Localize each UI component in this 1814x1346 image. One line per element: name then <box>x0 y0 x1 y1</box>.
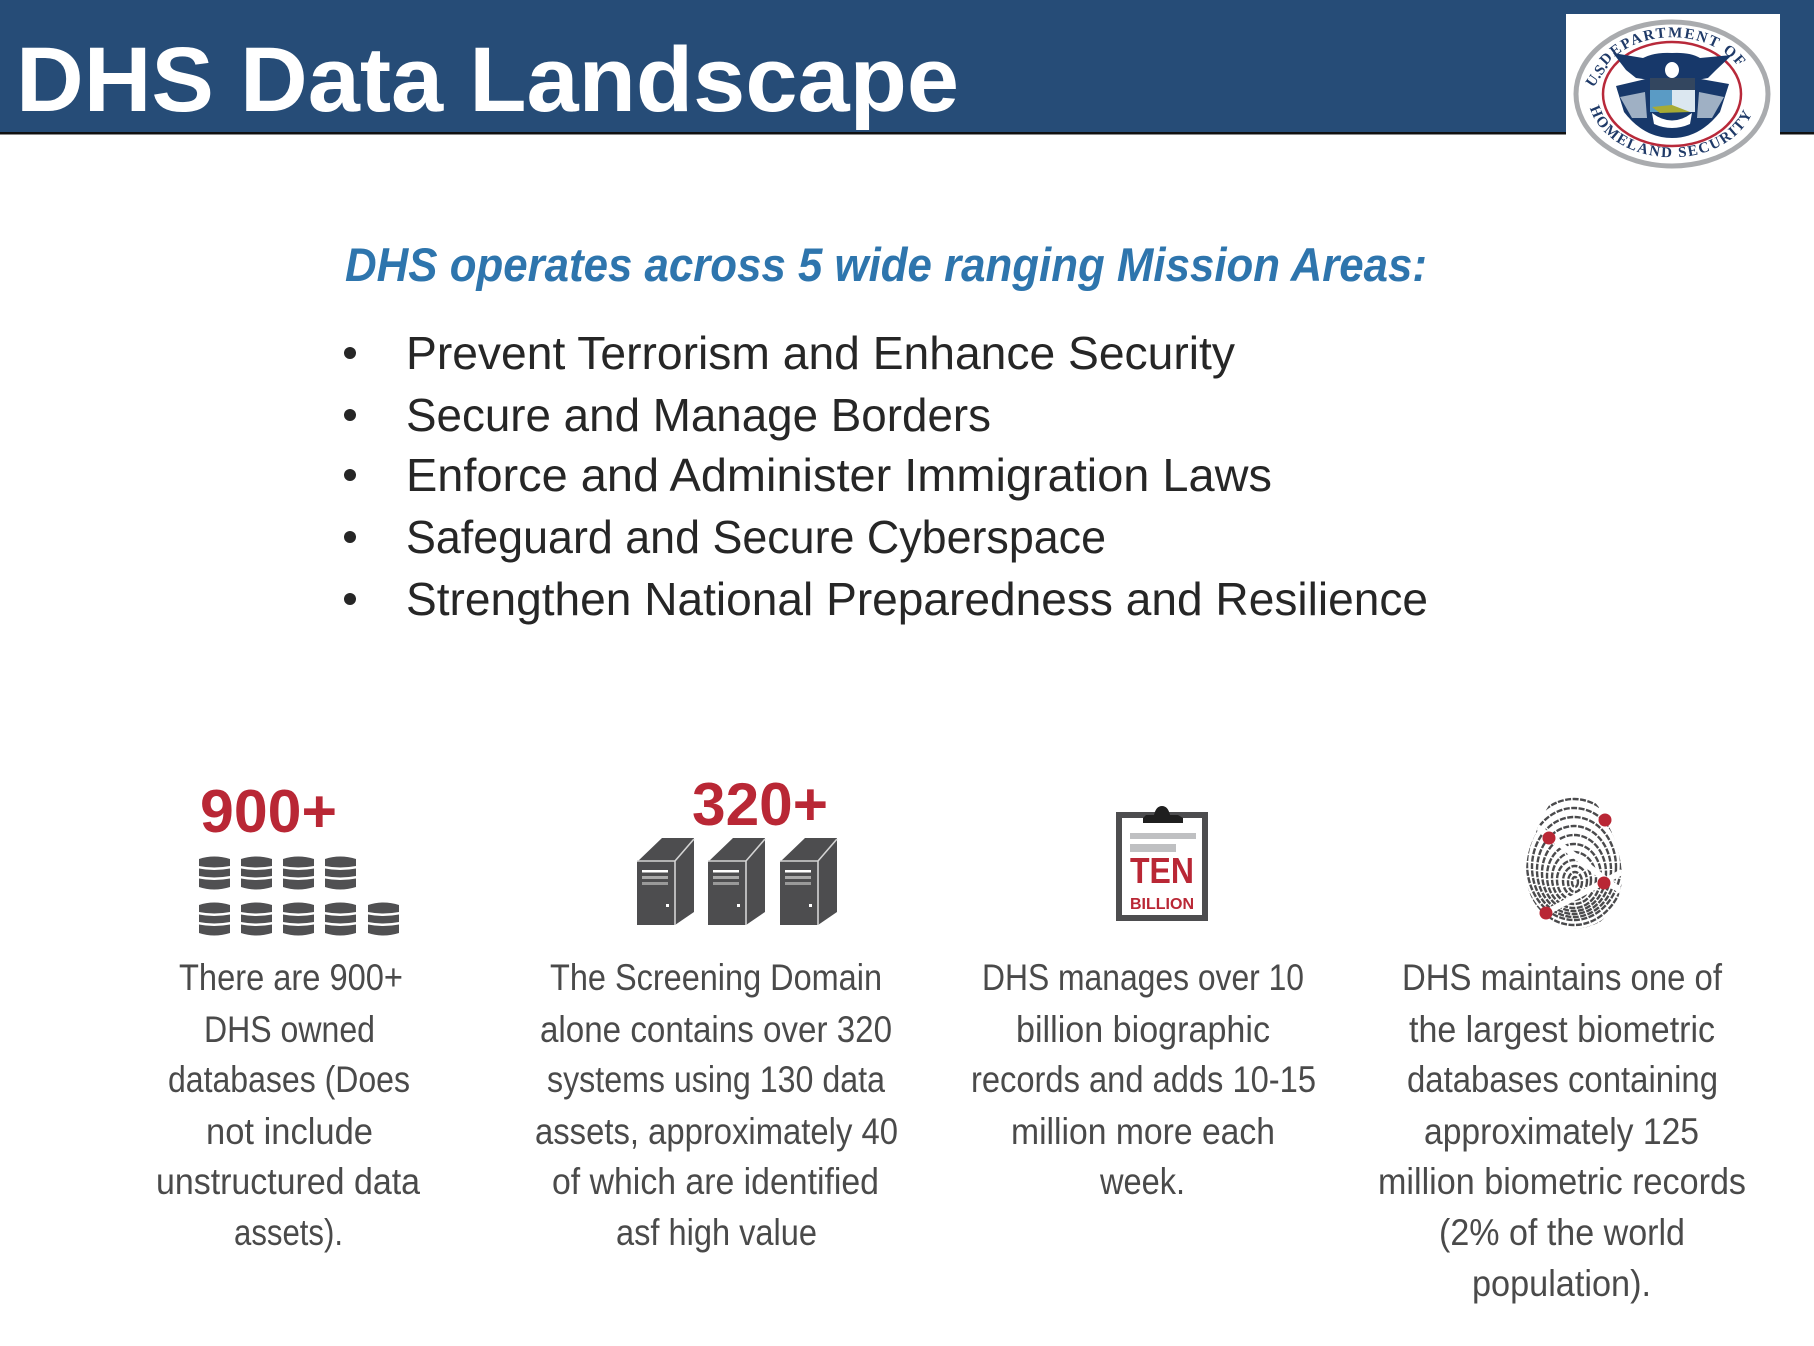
icon: DHS seal: HOMELAND SECURITY <box>1590 104 1751 158</box>
icon: DHS seal: U.S. <box>1583 59 1612 90</box>
text: databases: unstructured data <box>156 1161 420 1202</box>
bullet list: mission areas: Enforce and Administer Immigration Laws <box>406 449 1272 501</box>
bullet list: mission areas: Prevent Terrorism and Enhance Security <box>406 327 1235 379</box>
text: biographic records <box>971 957 1316 1202</box>
text: databases: databases (Does <box>168 1059 410 1100</box>
title: DHS Data Landscape <box>16 29 959 131</box>
icon: clipboard ten billion <box>1119 806 1205 918</box>
header band <box>0 0 1814 134</box>
text: biographic records: records and adds 10-15 <box>971 1059 1316 1100</box>
text: biographic records: DHS manages over 10 <box>982 957 1304 998</box>
text: databases: DHS owned <box>204 1009 375 1050</box>
text: biometric records: DHS maintains one of <box>1402 957 1723 998</box>
icon: database stacks <box>199 856 399 936</box>
text: biometric records: million biometric records <box>1378 1161 1746 1202</box>
text: databases <box>156 957 420 1253</box>
bullet list: mission areas <box>344 327 1428 625</box>
stat: 900+ number: 900+ <box>200 778 337 845</box>
text: biographic records: week. <box>1099 1161 1185 1202</box>
text: biometric records: approximately 125 <box>1424 1111 1699 1152</box>
text: databases: assets). <box>234 1212 343 1253</box>
text: screening domain: of which are identified <box>552 1161 879 1202</box>
icon: clipboard ten billion: TEN <box>1130 850 1194 891</box>
text: screening domain: The Screening Domain <box>550 957 882 998</box>
icon: DHS seal: DEPARTMENT OF <box>1598 27 1746 66</box>
text: biometric records: population). <box>1472 1263 1651 1304</box>
icon: fingerprint <box>1526 798 1622 929</box>
text: biometric records: databases containing <box>1407 1059 1718 1100</box>
icon: DHS seal <box>1566 14 1780 168</box>
text: screening domain: assets, approximately 40 <box>535 1111 898 1152</box>
text: biographic records: billion biographic <box>1016 1009 1270 1050</box>
text: screening domain: asf high value <box>616 1212 817 1253</box>
heading: mission areas: DHS operates across 5 wide ranging Mission Areas: <box>345 238 1427 291</box>
icon: clipboard ten billion: BILLION <box>1130 896 1194 913</box>
text: biometric records: the largest biometric <box>1409 1009 1715 1050</box>
bullet list: mission areas: Secure and Manage Borders <box>406 389 991 441</box>
text: databases: There are 900+ <box>179 957 403 998</box>
icon: servers <box>637 838 837 925</box>
text: biometric records <box>1378 957 1746 1304</box>
stat: 320+ number: 320+ <box>692 771 828 838</box>
text: screening domain: alone contains over 320 <box>540 1009 892 1050</box>
text: biometric records: (2% of the world <box>1439 1212 1685 1253</box>
text: databases: not include <box>206 1111 373 1152</box>
bullet list: mission areas: Safeguard and Secure Cyberspace <box>406 511 1106 563</box>
text: screening domain: systems using 130 data <box>547 1059 885 1100</box>
bullet list: mission areas: Strengthen National Preparedness and Resilience <box>406 573 1428 625</box>
text: screening domain <box>535 957 898 1253</box>
text: biographic records: million more each <box>1011 1111 1275 1152</box>
